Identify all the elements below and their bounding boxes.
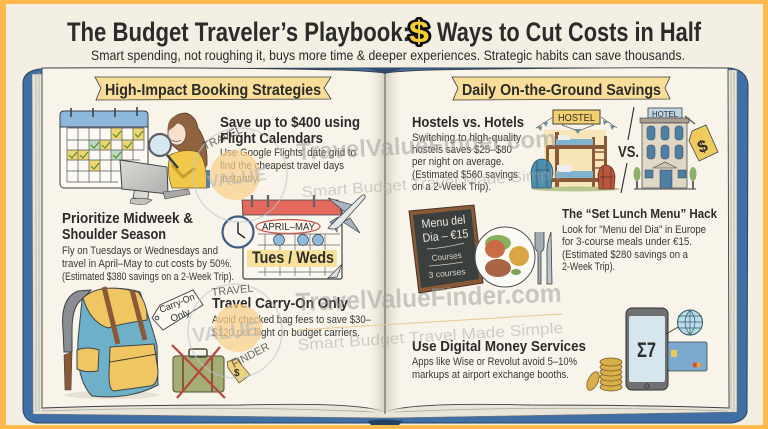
text: midweek and shoulder season: Fly on Tuesdays or Wednesdays and	[62, 245, 218, 257]
watermark: upper: TRAVEL	[201, 124, 244, 153]
text: digital money services	[412, 338, 586, 381]
text: midweek and shoulder season	[62, 211, 234, 283]
icon: bank card	[668, 342, 707, 371]
icon: red backpack	[598, 165, 615, 189]
open book	[23, 68, 748, 425]
text: carry-on only: Travel Carry-On Only	[212, 296, 348, 312]
illustration: chalkboard menu	[409, 205, 483, 293]
illustration: hostel bunk beds	[532, 110, 620, 192]
text: carry-on only: $120 per flight on budget carriers.	[212, 327, 360, 339]
icon: blue backpack	[531, 159, 553, 188]
text: set lunch menu hack: The “Set Lunch Menu” Hack	[562, 206, 718, 221]
text: hostels vs hotels: Switching to high-quality	[412, 132, 521, 144]
icon: globe	[677, 310, 703, 335]
text: digital money services: Use Digital Money Services	[412, 338, 586, 355]
right page	[385, 68, 729, 412]
text: vs	[618, 107, 639, 193]
text: flight calendars: instantly.	[220, 173, 260, 185]
text: set lunch menu hack: for 3-course meals under €15.	[562, 236, 692, 248]
watermark: lower: FINDER	[230, 341, 272, 371]
illustration: hotel building: HOTEL	[652, 109, 678, 119]
text: hostels vs hotels: Hostels vs. Hotels	[412, 115, 524, 131]
watermark: lower: VALUE	[191, 318, 259, 347]
text: hostels vs hotels: on a 2-Week Trip).	[412, 181, 491, 193]
watermark: upper: Smart Budget Travel Made Simple	[301, 166, 564, 201]
heading ribbon: left: High-Impact Booking Strategies	[105, 82, 321, 99]
watermark: upper	[193, 124, 564, 222]
text: flight calendars: Save up to $400 using	[220, 115, 360, 131]
illustration: plate of food	[475, 227, 535, 287]
illustration: chalkboard menu: Menu del	[421, 212, 466, 231]
watermark: lower: TravelValueFinder.com	[295, 278, 562, 317]
text: flight calendars: find the cheapest travel days	[220, 160, 344, 172]
text: hostels vs hotels: hostels saves $25–$80	[412, 144, 512, 156]
text: hostels vs hotels: (Estimated $560 savings	[412, 169, 518, 181]
illustration: April-May calendar	[242, 195, 342, 279]
text: flight calendars: Flight Calendars	[220, 131, 323, 147]
page stack	[32, 70, 737, 418]
icon: dollar sign: $	[409, 14, 429, 49]
watermark: lower: Smart Budget Travel Made Simple	[297, 320, 564, 354]
price tag: $	[234, 368, 240, 379]
watermark: upper: VALUE	[206, 164, 268, 192]
text: set lunch menu hack: 2-Week Trip).	[562, 261, 615, 273]
text: hostels vs hotels: per night on average.	[412, 156, 504, 168]
icon: fork and knife	[535, 232, 552, 284]
illustration: phone with money app	[626, 308, 680, 390]
heading ribbon: right: Daily On-the-Ground Savings	[462, 82, 661, 99]
subtitle: Smart spending, not roughing it, buys more time & deeper experiences. Strategic habits can save thousands.	[91, 47, 685, 63]
title	[67, 14, 702, 49]
title: The Budget Traveler’s Playbook:	[67, 17, 410, 47]
text: set lunch menu hack: Look for "Menu del Dia" in Europe	[562, 224, 706, 236]
illustration: woman with magnifier and computer	[120, 113, 210, 204]
icon: clock	[222, 216, 254, 248]
illustration: chalkboard menu: Dia – €15	[422, 226, 469, 245]
text: set lunch menu hack	[562, 206, 718, 273]
page edges	[36, 71, 734, 412]
illustration: April-May calendar: Tues / Weds	[252, 248, 334, 267]
left page	[42, 68, 385, 412]
illustration: phone with money app: Σ7	[637, 339, 656, 362]
text: midweek and shoulder season: (Estimated $380 savings on a 2-Week Trip).	[62, 271, 234, 283]
text: digital money services: Apps like Wise or Revolut avoid 5–10%	[412, 356, 577, 368]
text: flight calendars: Use Google Flights’ date grid to	[220, 147, 356, 159]
title: Ways to Cut Costs in Half	[437, 17, 702, 47]
tag: carry-on only: Carry-On	[158, 292, 196, 316]
illustration: chalkboard menu: 3 courses	[428, 266, 466, 280]
icon: airplane	[328, 195, 365, 233]
illustration: chalkboard menu: Courses	[431, 250, 462, 263]
text: vs: VS.	[618, 144, 639, 161]
illustration: crossed-out suitcase	[172, 345, 250, 398]
watermark: upper: TravelValueFinder.com	[296, 125, 557, 166]
watermark: lower	[188, 278, 564, 378]
illustration: hotel building	[634, 108, 696, 189]
text: midweek and shoulder season: travel in April–May to cut costs by 50%.	[62, 258, 232, 270]
text: digital money services: markups at airport exchange booths.	[412, 369, 569, 381]
text: hostels vs hotels	[412, 115, 524, 193]
text: set lunch menu hack: (Estimated $280 savings on a	[562, 249, 689, 261]
highlighted days	[67, 128, 144, 171]
illustration: flight calendar	[60, 107, 148, 188]
text: carry-on only	[212, 296, 372, 339]
tag: carry-on only	[152, 290, 203, 330]
illustration: backpack	[63, 287, 160, 399]
hostel sign: HOSTEL	[558, 112, 595, 124]
icon: hotel price tag: $	[695, 136, 711, 157]
tag: carry-on only: Only	[169, 307, 192, 325]
text: midweek and shoulder season: Prioritize Midweek &	[62, 211, 193, 227]
watermark: lower: TRAVEL	[211, 283, 254, 299]
icon: coin stack	[584, 358, 622, 392]
spine fold	[366, 73, 404, 412]
text: carry-on only: Avoid checked bag fees to save $30–	[212, 314, 372, 326]
heading ribbon: left	[95, 77, 331, 100]
text: midweek and shoulder season: Shoulder Season	[62, 227, 166, 243]
book cover	[23, 68, 748, 423]
heading ribbon: right	[452, 77, 670, 100]
icon: hotel price tag	[685, 116, 718, 161]
text: flight calendars	[220, 115, 360, 185]
month label: APRIL–MAY	[262, 221, 315, 233]
